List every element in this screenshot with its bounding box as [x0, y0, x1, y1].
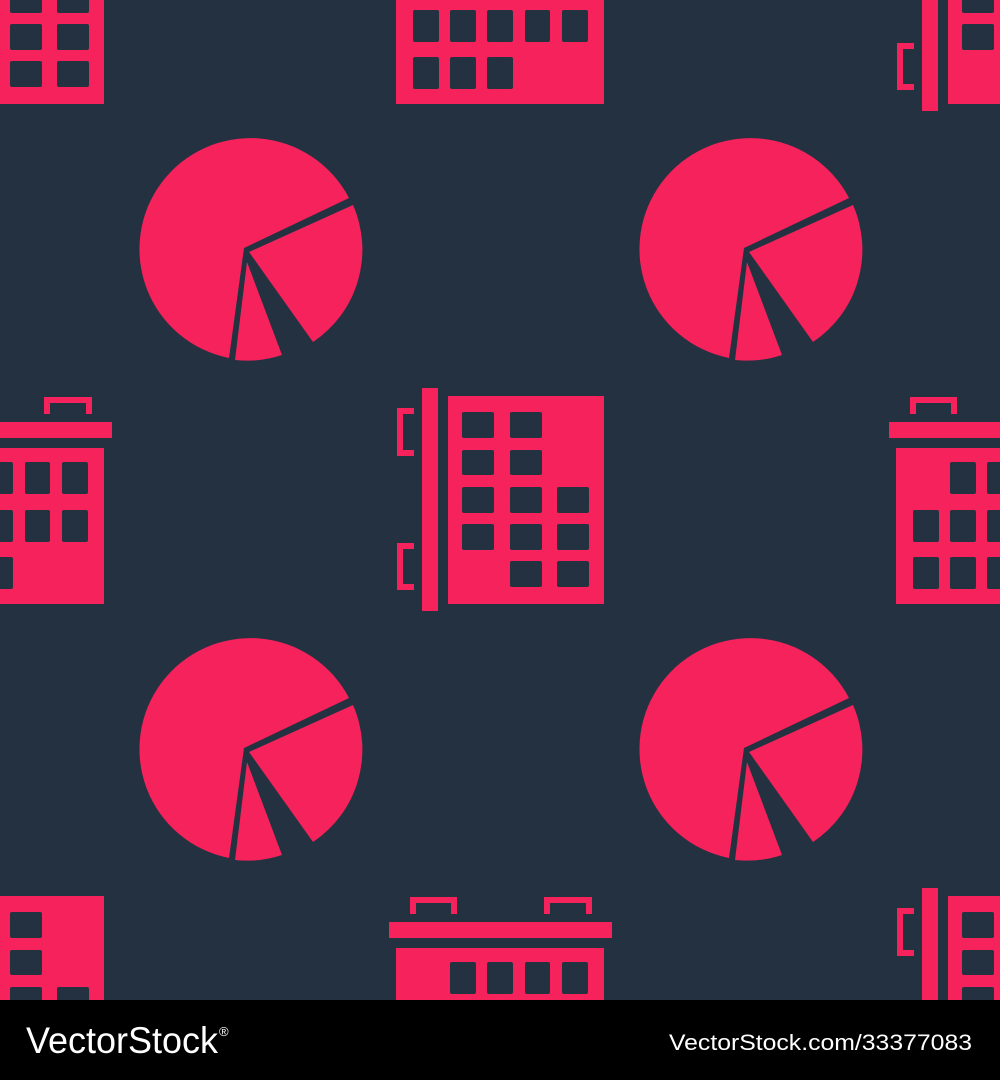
icon: building bottom-left corner [0, 888, 104, 1080]
footer registered mark: ® [219, 1024, 229, 1039]
footer url: VectorStock.com/33377083 [669, 1030, 972, 1055]
footer brand: VectorStock [26, 1020, 218, 1061]
icon: pie chart bottom-right [639, 638, 862, 861]
footer bar [0, 1000, 1000, 1080]
icon: upright building top edge [389, 0, 612, 104]
icon: pie chart top-left [139, 138, 362, 361]
icon: building top-left corner [0, 0, 104, 111]
icon: building top-right corner [897, 0, 1000, 111]
icon: building bottom-right corner [897, 888, 1000, 1080]
icon: pie chart bottom-left [139, 638, 362, 861]
icon: upright building right edge [889, 397, 1000, 604]
icon: upright building bottom edge [389, 897, 612, 1080]
icon: upright building left edge [0, 397, 112, 604]
icon: pie chart top-right [639, 138, 862, 361]
icon: building center [397, 388, 604, 611]
